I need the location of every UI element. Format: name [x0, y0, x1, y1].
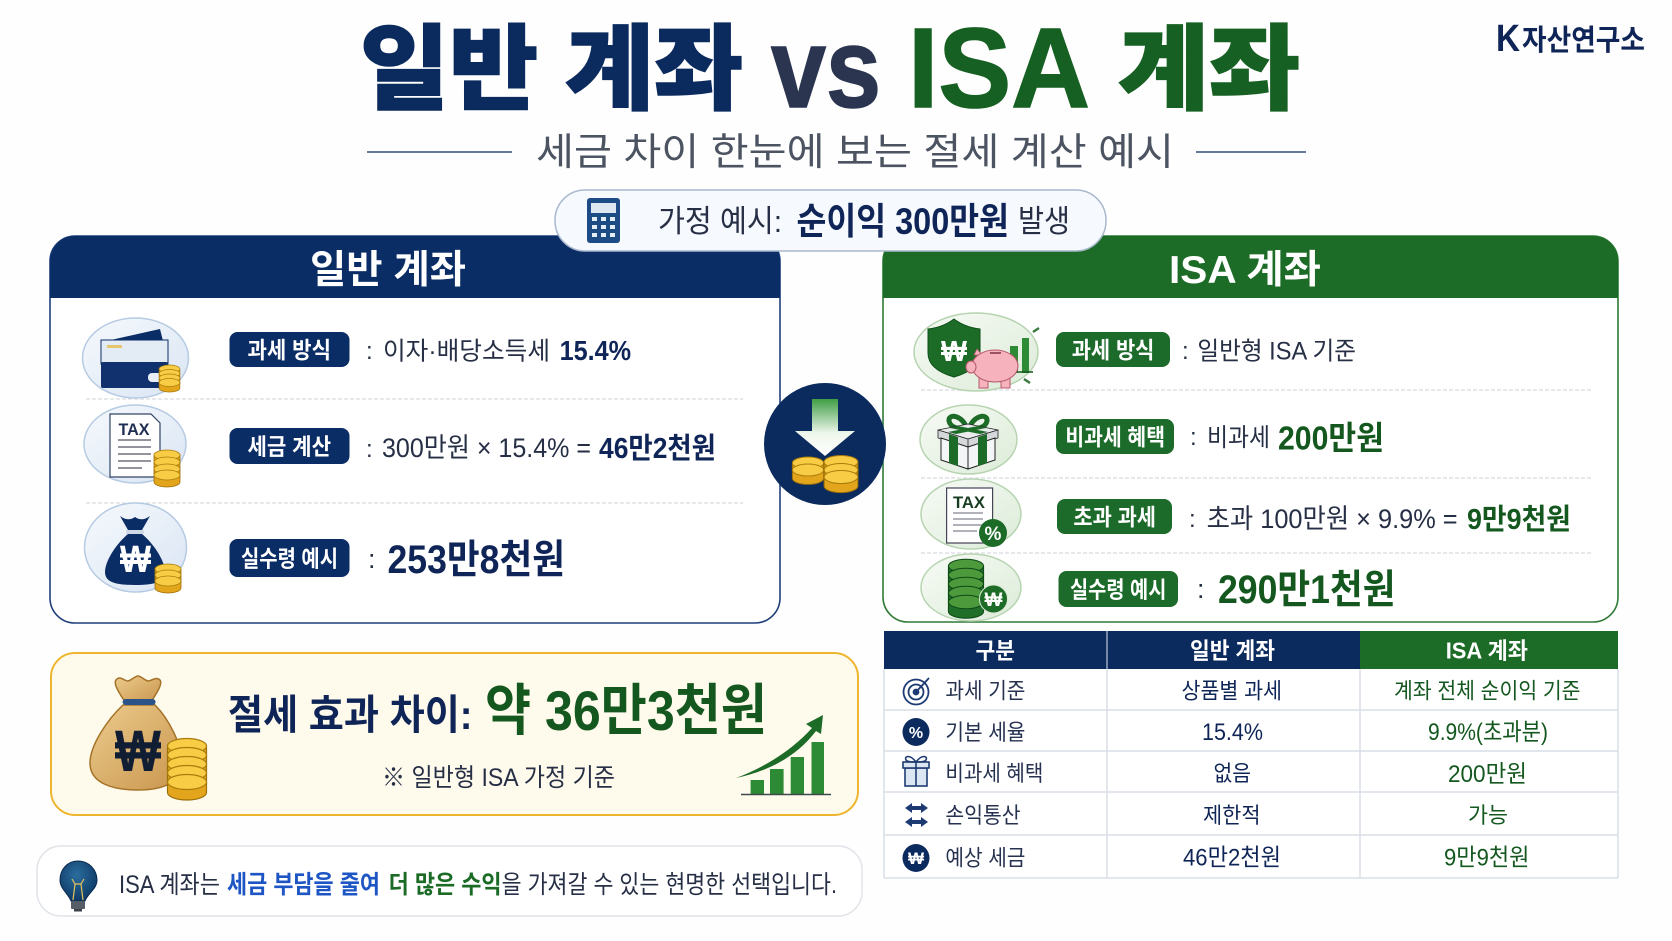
table header: 구분	[976, 638, 1015, 664]
row: taxation method	[1056, 332, 1356, 367]
callout: tax saving	[51, 653, 858, 815]
title: 일반 계좌	[360, 18, 743, 122]
row: tax-free benefit: :	[1190, 424, 1197, 451]
icon: won coin	[902, 844, 930, 872]
panel: ISA account	[883, 236, 1618, 622]
icon: tax document with percent: %	[985, 524, 1002, 545]
icon: exchange arrows	[905, 803, 928, 827]
icon: gold money bag	[90, 676, 206, 800]
tip box: ISA 계좌는	[119, 871, 220, 899]
tip box	[37, 846, 862, 916]
icon: shield and piggy bank	[914, 313, 1039, 391]
row: excess taxation: 초과 100만원 × 9.9% =	[1207, 504, 1458, 534]
icon: calculator	[587, 198, 620, 243]
icon: percent: %	[909, 725, 923, 742]
row: excess taxation	[1057, 499, 1571, 536]
title: 계좌	[1118, 18, 1300, 122]
brand logo	[1496, 18, 1645, 60]
row: net receipt: 실수령 예시	[241, 546, 338, 572]
row: net receipt: :	[1197, 574, 1205, 604]
icon: gift box	[920, 405, 1017, 474]
title: vs	[771, 5, 881, 131]
row: expected tax: 예상 세금	[945, 846, 1025, 870]
row: expected tax: 46만2천원	[1183, 844, 1281, 872]
brand logo: K	[1496, 18, 1520, 60]
saving heading: 약 36만3천원	[485, 679, 767, 742]
row: taxation method: :	[366, 338, 373, 365]
row: tax-free benefit: 비과세 혜택	[945, 761, 1043, 786]
row: loss offset: 손익통산	[945, 803, 1021, 828]
icon: down arrow	[795, 399, 855, 456]
tip box: 을 가져갈 수 있는 현명한 선택입니다.	[502, 871, 837, 899]
row: base rate	[902, 718, 1548, 746]
row: loss offset: 제한적	[1203, 803, 1260, 828]
row: tax-free benefit: 200만원	[1448, 761, 1527, 788]
footnote: ※ 일반형 ISA 가정 기준	[382, 764, 615, 792]
row: tax calculation: 46만2천원	[599, 432, 716, 465]
icon: money bag	[84, 503, 186, 593]
assumption pill: 순이익 300만원	[796, 201, 1009, 242]
row: tax calculation	[230, 428, 716, 465]
row: net receipt: 253만8천원	[388, 538, 565, 582]
icon: gold money bag: ₩	[115, 719, 161, 784]
panel: general account	[50, 236, 780, 623]
row: taxation method	[230, 332, 631, 367]
row: tax basis: 과세 기준	[945, 678, 1025, 704]
row: taxation method: 일반형 ISA 기준	[1197, 338, 1356, 366]
title: ISA	[908, 5, 1090, 131]
icon: wallet	[82, 318, 188, 398]
row: net receipt: :	[368, 544, 376, 574]
icon: shield and piggy bank: ₩	[941, 336, 968, 368]
row: excess taxation: 초과 과세	[1073, 504, 1156, 530]
panel header: ISA 계좌	[1169, 249, 1321, 292]
row: excess taxation: 9만9천원	[1467, 503, 1571, 536]
icon: gold coins	[792, 456, 858, 493]
subtitle: 세금 차이 한눈에 보는 절세 계산 예시	[536, 132, 1174, 174]
table header	[884, 631, 1618, 669]
center arrow badge	[764, 383, 886, 505]
icon: green coins	[921, 554, 1021, 621]
brand logo: 자산연구소	[1522, 24, 1645, 57]
row: tax calculation: :	[366, 436, 373, 463]
saving heading	[228, 679, 767, 742]
row: taxation method: 과세 방식	[248, 337, 331, 363]
icon: light bulb	[60, 861, 97, 912]
row: taxation method: :	[1182, 338, 1189, 365]
row: loss offset: 가능	[1468, 803, 1508, 828]
row: net receipt: 실수령 예시	[1070, 576, 1166, 602]
icon: money bag: ₩	[120, 539, 151, 581]
row: expected tax: 9만9천원	[1444, 844, 1530, 872]
icon: target	[904, 678, 929, 704]
table header: ISA 계좌	[1446, 638, 1528, 664]
saving heading: 절세 효과 차이:	[228, 692, 472, 738]
row: taxation method: 15.4%	[560, 335, 631, 366]
row: net receipt	[1058, 568, 1396, 612]
row: tax-free benefit	[903, 756, 1527, 788]
panel header	[50, 236, 780, 298]
icon: won coin: ₩	[908, 849, 925, 868]
title	[360, 5, 1300, 131]
row: taxation method: 과세 방식	[1072, 337, 1154, 363]
row: tax-free benefit: 비과세 혜택	[1065, 424, 1165, 450]
row: net receipt: 290만1천원	[1218, 568, 1396, 612]
panel header: 일반 계좌	[310, 249, 466, 292]
row: tax basis: 계좌 전체 순이익 기준	[1394, 678, 1580, 704]
row: base rate: 15.4%	[1202, 719, 1263, 746]
row: taxation method: 이자·배당소득세	[383, 338, 550, 366]
icon: tax document	[84, 405, 186, 487]
table: comparison	[884, 631, 1618, 878]
row: tax-free benefit: 없음	[1214, 761, 1251, 786]
icon: percent	[902, 718, 930, 746]
row: tax-free benefit: 200만원	[1278, 420, 1384, 456]
row: net receipt	[230, 538, 565, 582]
icon: rising chart	[736, 715, 831, 794]
icon: tax document: TAX	[118, 420, 150, 439]
icon: tax document with percent	[921, 479, 1021, 549]
tip box: 세금 부담을 줄여	[227, 871, 380, 899]
row: tax calculation: 세금 계산	[248, 434, 331, 460]
icon: green coins: ₩	[985, 590, 1003, 611]
row: loss offset	[905, 803, 1508, 828]
table header: 일반 계좌	[1190, 638, 1275, 664]
row: tax basis	[904, 678, 1580, 704]
panel header	[883, 236, 1618, 298]
row: base rate: 기본 세율	[945, 720, 1025, 745]
tip box: 더 많은 수익	[389, 871, 502, 899]
row: expected tax	[902, 844, 1530, 872]
assumption pill: 발생	[1018, 204, 1070, 239]
row: tax-free benefit: 비과세	[1207, 424, 1270, 452]
icon: tax document with percent: TAX	[953, 493, 986, 512]
row: tax calculation: 300만원 × 15.4% =	[382, 433, 591, 463]
row: base rate: 9.9%(초과분)	[1428, 719, 1548, 746]
row: tax basis: 상품별 과세	[1182, 678, 1282, 704]
row: tax-free benefit	[1056, 419, 1384, 456]
row: excess taxation: :	[1189, 506, 1196, 533]
assumption pill	[555, 190, 1106, 251]
icon: gift	[903, 756, 929, 786]
assumption pill: 가정 예시:	[658, 204, 782, 239]
